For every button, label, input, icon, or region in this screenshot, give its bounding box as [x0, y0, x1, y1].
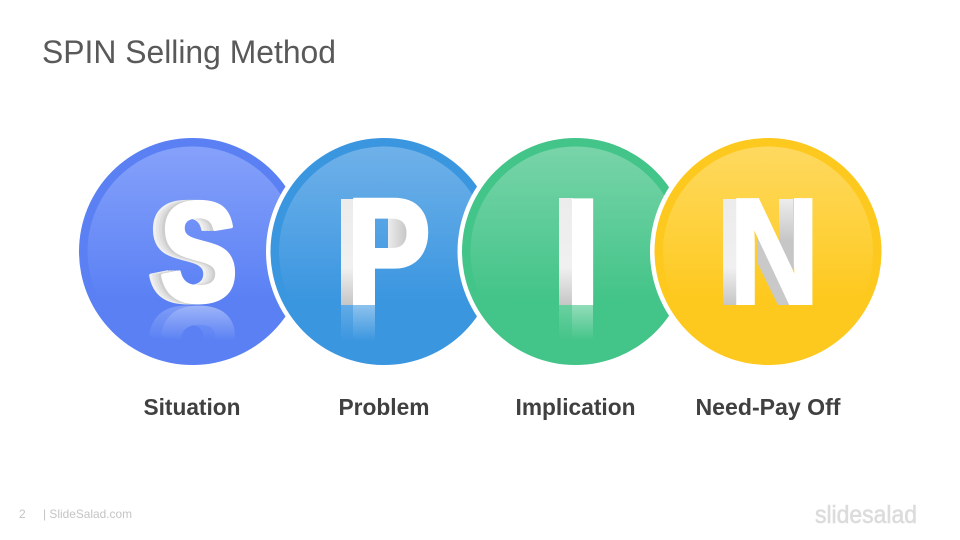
reflection of letter I: [559, 305, 593, 341]
circle: I Implication: [458, 134, 694, 370]
label: Implication: Implication: [516, 394, 636, 420]
letter S with extrusion: S: [153, 173, 232, 331]
label: Problem: Problem: [338, 394, 430, 420]
letter I with extrusion: I: [562, 166, 603, 339]
title: SPIN Selling Method: [42, 34, 336, 70]
reflection of letter S: S: [159, 279, 238, 437]
circle: S Situation: [79, 138, 286, 365]
reflection of letter P: [341, 305, 375, 341]
footer source: | SlideSalad.com: [43, 507, 132, 521]
letter N with extrusion: N: [729, 167, 820, 336]
reflection of letter S: [150, 306, 235, 336]
letter P with extrusion: P: [346, 168, 431, 335]
letter S with extrusion: S: [150, 173, 229, 331]
letter S with extrusion: S: [156, 173, 235, 331]
reflection of letter S: S: [147, 279, 226, 437]
letter S with extrusion: S: [147, 173, 226, 331]
label: Situation: Situation: [144, 394, 240, 420]
page number: 2: [19, 507, 26, 521]
circle: P Problem: [266, 134, 502, 370]
logo: slidesalad: slidesalad: [815, 501, 917, 529]
letter S with extrusion: S: [159, 173, 238, 331]
circle: N Need-Pay Off: [650, 134, 886, 370]
label: Need-Pay Off: Need-Pay Off: [696, 394, 841, 420]
